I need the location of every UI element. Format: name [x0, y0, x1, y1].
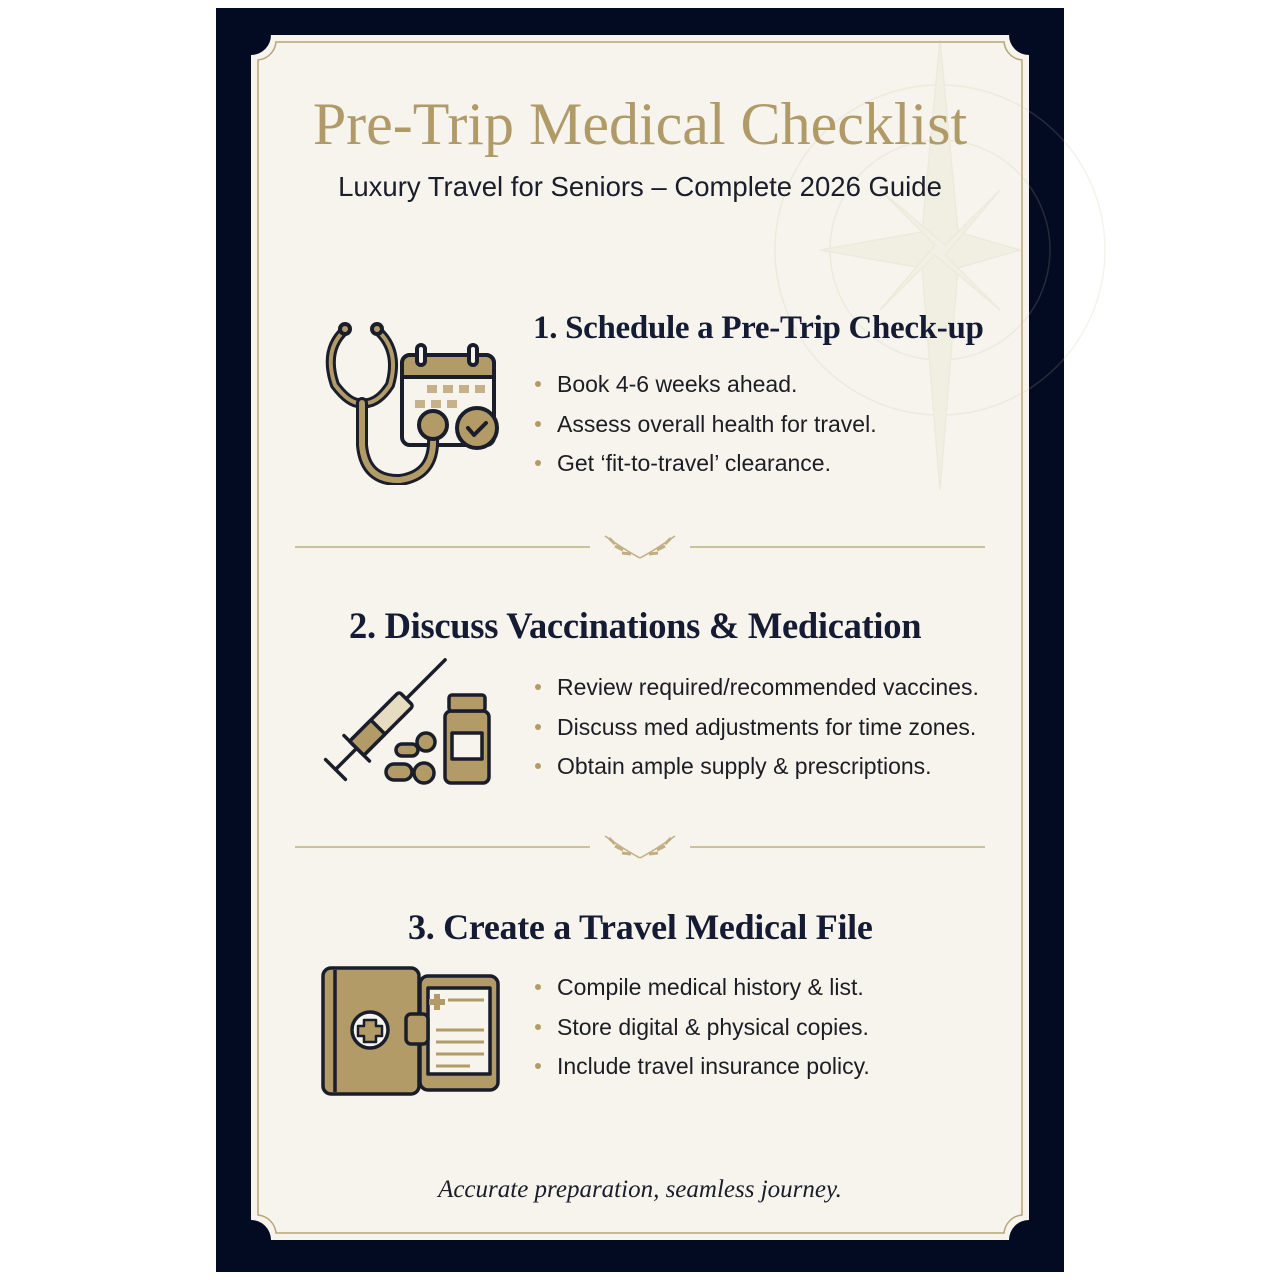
section 2	[324, 605, 979, 785]
bullets 2: Discuss med adjustments for time zones.	[557, 714, 976, 740]
bullets 2: Obtain ample supply & prescriptions.	[557, 753, 932, 779]
footer tagline: Accurate preparation, seamless journey.	[438, 1176, 842, 1203]
bullets 2	[535, 674, 979, 779]
subtitle: Luxury Travel for Seniors – Complete 2026 Guide	[338, 171, 942, 202]
icon: stethoscope and calendar	[326, 322, 499, 485]
bullets 2: Review required/recommended vaccines.	[557, 674, 979, 700]
heading 2: 2. Discuss Vaccinations & Medication	[349, 605, 921, 646]
section 3	[321, 907, 873, 1096]
icon: syringe, pills, bottle	[324, 658, 491, 785]
bullets 3: Compile medical history & list.	[557, 974, 864, 1000]
section 1	[326, 310, 984, 485]
heading 3: 3. Create a Travel Medical File	[408, 907, 873, 947]
title: Pre-Trip Medical Checklist	[313, 91, 967, 157]
bullets 3: Store digital & physical copies.	[557, 1014, 869, 1040]
bullets 1: Assess overall health for travel.	[557, 410, 877, 436]
compass decoration	[775, 40, 1105, 490]
navy frame	[216, 8, 1064, 1272]
bullets 1: Book 4-6 weeks ahead.	[557, 371, 797, 397]
bullets 3: Include travel insurance policy.	[557, 1053, 870, 1079]
bullets 3	[535, 974, 870, 1079]
bullets 1: Get ‘fit-to-travel’ clearance.	[557, 450, 831, 476]
bullets 1	[535, 371, 877, 476]
icon: medical folder and tablet	[321, 966, 500, 1096]
heading 1: 1. Schedule a Pre-Trip Check-up	[533, 310, 984, 346]
divider 2	[295, 836, 985, 858]
divider 1	[295, 536, 985, 558]
